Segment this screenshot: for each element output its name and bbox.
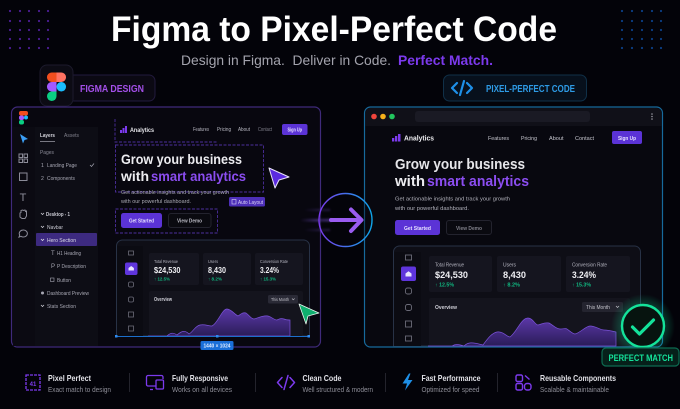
perfect match badge xyxy=(602,294,679,366)
site hero description: Get actionable insights and track your growth xyxy=(395,196,510,202)
feature: fully responsive xyxy=(146,373,232,394)
layers panel: Stats Section xyxy=(47,304,76,310)
layers panel: P xyxy=(51,264,55,270)
decorative dots: purple xyxy=(9,10,49,49)
layers panel: Navbar xyxy=(47,225,63,231)
figma design badge xyxy=(40,65,155,106)
feature: clean code: Clean Code xyxy=(302,373,342,383)
subtitle: Perfect Match. xyxy=(398,52,493,68)
feature: fast performance xyxy=(402,373,481,394)
site buttons: View Demo xyxy=(456,226,483,232)
site stat card: total revenue: ↑ 12.5% xyxy=(435,282,455,288)
layers panel: Button xyxy=(57,278,71,284)
icon: green cursor xyxy=(299,304,319,324)
code badge xyxy=(444,75,586,101)
icon: pixel frame: 41 xyxy=(30,382,37,388)
panel: code output xyxy=(364,107,662,347)
site hero heading: Grow your business xyxy=(395,156,525,173)
site stat card: users: Users xyxy=(503,262,516,268)
feature: clean code xyxy=(278,373,373,394)
layers panel: H1 Heading xyxy=(57,251,81,257)
canvas navbar: Pricing xyxy=(217,127,231,133)
site stat card: conversion rate: Conversion Rate xyxy=(572,262,607,268)
canvas hero heading: Grow your business xyxy=(121,152,242,167)
layers panel: Components xyxy=(47,176,75,182)
feature: pixel perfect: Pixel Perfect xyxy=(48,373,91,383)
site overview chart xyxy=(428,298,630,346)
subtitle: Design in Figma. Deliver in Code. xyxy=(181,52,391,68)
icon: small figma logo xyxy=(19,111,28,124)
site navbar: About xyxy=(549,136,564,142)
stat card: total revenue: Total Revenue xyxy=(154,259,178,264)
layers panel: 1 xyxy=(41,163,44,169)
canvas hero heading: smart analytics xyxy=(151,169,246,184)
icon: frame xyxy=(20,173,27,180)
layers panel: T xyxy=(51,251,55,257)
feature: pixel perfect xyxy=(26,373,111,394)
canvas hero description: Get actionable insights and track your growth xyxy=(121,190,229,196)
canvas hero heading: with xyxy=(120,169,149,184)
layers panel: P Description xyxy=(57,264,86,270)
layers panel: Layers xyxy=(40,133,55,139)
stat card: users: Users xyxy=(208,259,219,264)
feature: clean code: Well structured & modern xyxy=(302,385,373,394)
stat card: users xyxy=(203,253,251,285)
site stat card: total revenue: $24,530 xyxy=(435,270,468,280)
canvas navbar: Contact xyxy=(258,127,272,133)
site navbar: Contact xyxy=(575,136,594,142)
site stat card: users: ↑ 8.2% xyxy=(503,282,521,288)
icon: devices xyxy=(146,376,164,390)
canvas hero heading xyxy=(120,152,246,184)
selection dashes xyxy=(115,119,264,233)
arrow connector xyxy=(300,194,372,246)
canvas hero description: with our powerful dashboard. xyxy=(121,199,191,205)
stat card: conversion rate: Conversion Rate xyxy=(260,259,288,264)
figma design badge: FIGMA DESIGN xyxy=(80,84,144,95)
selection line and size tag xyxy=(115,335,310,350)
site hero heading: smart analytics xyxy=(427,173,529,190)
feature: fast performance: Fast Performance xyxy=(422,373,481,383)
overview chart: Overview xyxy=(154,297,172,303)
site hero heading: with xyxy=(394,173,425,190)
canvas hero description xyxy=(121,190,229,205)
icon: code brackets xyxy=(452,81,472,95)
stat card: conversion rate: ↑ 15.3% xyxy=(260,276,276,282)
feature: pixel perfect: Exact match to design xyxy=(48,385,111,394)
site stat card: conversion rate: 3.24% xyxy=(572,270,596,280)
feature: fast performance: Optimized for speed xyxy=(422,385,480,394)
site sidebar icons xyxy=(401,255,416,341)
overview chart xyxy=(148,291,303,336)
icon: check circle xyxy=(622,305,664,347)
feature: fully responsive: Works on all devices xyxy=(172,385,232,394)
icon: arrow xyxy=(331,210,362,231)
canvas navbar: About xyxy=(238,127,251,133)
canvas buttons: Get Started xyxy=(129,218,154,224)
icon: components xyxy=(19,154,28,162)
layers panel: Assets xyxy=(64,133,79,139)
stat card: users: 8,430 xyxy=(208,266,226,275)
icon: purple cursor xyxy=(269,168,289,188)
selection line and size tag: 1440 × 1024 xyxy=(204,344,231,350)
decorative dots: blue xyxy=(621,10,662,49)
icon: comment xyxy=(19,230,27,237)
canvas navbar: Analytics xyxy=(130,127,154,134)
stat card: total revenue: ↑ 12.5% xyxy=(154,276,170,282)
site stat card: users xyxy=(497,256,561,292)
icon: text tool: T xyxy=(20,192,27,204)
auto layout tag xyxy=(229,197,265,206)
stat card: total revenue xyxy=(149,253,199,285)
canvas navbar xyxy=(120,124,308,135)
feature: reusable components xyxy=(516,373,616,394)
subtitle xyxy=(181,52,493,68)
stat card: total revenue: $24,530 xyxy=(154,266,181,275)
site navbar xyxy=(392,131,642,144)
icon: components xyxy=(516,375,531,390)
stat card: conversion rate xyxy=(255,253,303,285)
site stat card: users: 8,430 xyxy=(503,270,526,280)
site navbar: Pricing xyxy=(521,136,537,142)
site stat card: total revenue: Total Revenue xyxy=(435,262,464,268)
icon: pointer xyxy=(20,134,28,144)
icon: lightning bolt xyxy=(402,374,412,390)
layers panel: 2 xyxy=(41,176,44,182)
site navbar: Analytics xyxy=(404,134,434,142)
feature: reusable components: Scalable & maintainable xyxy=(540,385,609,394)
site hero heading xyxy=(394,156,529,190)
icon: hand xyxy=(20,210,26,218)
site stat card: conversion rate: ↑ 15.3% xyxy=(572,282,592,288)
code badge: PIXEL-PERFECT CODE xyxy=(486,84,575,95)
site buttons: Get Started xyxy=(404,226,432,232)
site overview chart: Overview xyxy=(435,305,458,311)
browser bar xyxy=(366,108,662,126)
site navbar: Sign Up xyxy=(618,136,636,142)
auto layout tag: Auto Layout xyxy=(238,200,264,206)
icon: code tag xyxy=(278,376,294,390)
overview chart: This Month xyxy=(271,297,289,302)
canvas navbar: Sign Up xyxy=(288,127,302,133)
selected layer: hero section xyxy=(36,233,97,246)
layers panel: Dashboard Preview xyxy=(47,291,89,297)
panel: figma design xyxy=(12,107,320,350)
site stat card: conversion rate xyxy=(566,256,630,292)
site hero description xyxy=(394,196,510,212)
canvas navbar: Features xyxy=(193,127,209,133)
feature: fully responsive: Fully Responsive xyxy=(172,373,228,383)
stat card: conversion rate: 3.24% xyxy=(260,266,279,275)
dashboard sidebar icons xyxy=(125,251,138,331)
site buttons xyxy=(395,220,492,235)
canvas buttons xyxy=(121,213,211,228)
site navbar: Features xyxy=(488,136,509,142)
figma toolbar xyxy=(13,111,35,346)
layers panel: Pages xyxy=(40,150,54,156)
title: Figma to Pixel-Perfect Code xyxy=(111,10,557,49)
selected layer: hero section: Hero Section xyxy=(47,238,76,244)
layers panel xyxy=(35,127,98,346)
site stat card: total revenue xyxy=(429,256,492,292)
layers panel: Landing Page xyxy=(47,163,77,169)
canvas buttons: View Demo xyxy=(177,218,203,224)
layers panel: Desktop - 1 xyxy=(46,212,70,218)
site overview chart: This Month xyxy=(586,305,610,311)
stat card: users: ↑ 8.2% xyxy=(208,276,222,282)
icon: figma logo xyxy=(47,72,66,101)
site hero description: with our powerful dashboard. xyxy=(394,206,469,212)
site dashboard xyxy=(394,246,640,346)
feature: reusable components: Reusable Components xyxy=(540,373,616,383)
dashboard preview xyxy=(116,240,310,336)
